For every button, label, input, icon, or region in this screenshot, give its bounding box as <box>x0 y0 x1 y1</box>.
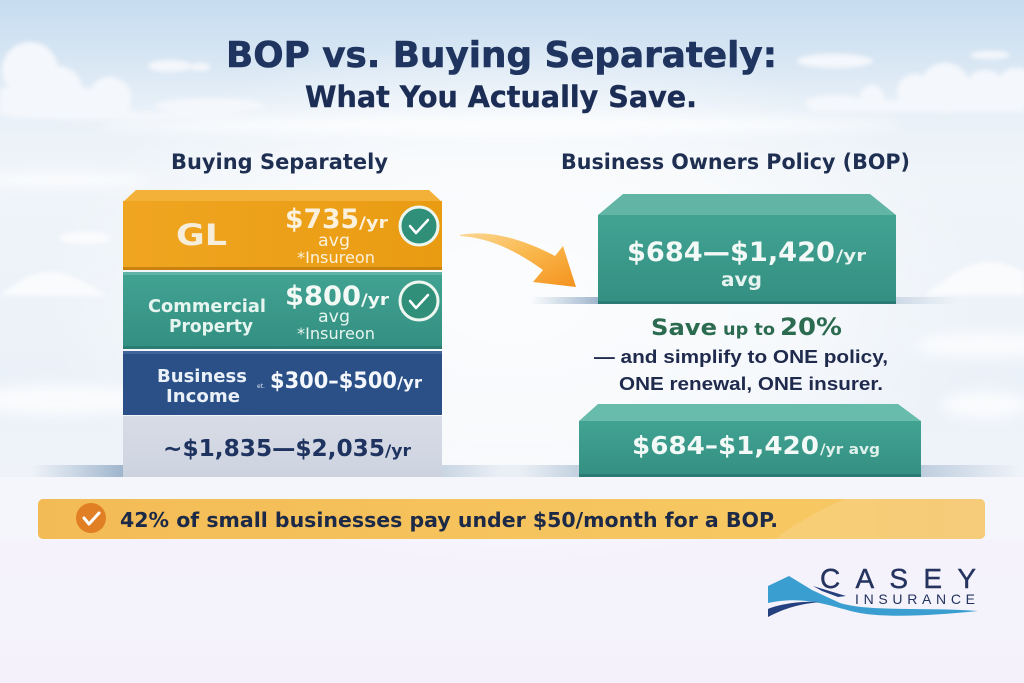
callout: savings: 20% <box>780 313 842 341</box>
callout: savings <box>594 313 888 394</box>
block: commercial property: Commercial <box>148 296 266 317</box>
block: general liability: avg <box>318 231 350 251</box>
callout: savings: Save <box>651 316 717 341</box>
block: business income: $300–$500 <box>270 369 397 394</box>
panel: BOP bottom block: /yr avg <box>820 442 880 458</box>
block: commercial property <box>123 272 442 349</box>
callout: savings: ONE renewal, ONE insurer. <box>619 374 883 394</box>
title: What You Actually Save. <box>305 80 697 114</box>
block: general liability <box>123 190 442 270</box>
logo: Casey Insurance: INSURANCE <box>855 591 975 607</box>
panel: buying separately stack <box>123 190 442 477</box>
panel: BOP bottom block: $684–$1,420 <box>632 431 819 460</box>
panel: BOP top block: $684—$1,420 <box>627 237 835 268</box>
title <box>226 35 777 114</box>
block: commercial property: Property <box>169 316 253 337</box>
block: commercial property: /yr <box>361 290 389 309</box>
block: general liability: *Insureon <box>297 248 375 267</box>
block: business income: /yr <box>397 373 422 392</box>
cloud: side wisps <box>0 232 1024 296</box>
icon: check badge <box>76 503 106 533</box>
block: total: /yr <box>385 441 411 460</box>
block: commercial property: avg <box>318 307 350 327</box>
callout: savings: up to <box>723 320 775 340</box>
block: business income <box>123 351 442 415</box>
block: general liability: /yr <box>359 213 388 232</box>
panel: BOP bottom block <box>579 404 921 477</box>
block: business income: Business <box>157 366 247 387</box>
block: business income: et. <box>257 383 265 390</box>
block: general liability: $735 <box>285 204 359 235</box>
banner: 42% stat: 42% of small businesses pay under $50/month for a BOP. <box>120 508 778 532</box>
callout: savings: — and simplify to ONE policy, <box>594 347 888 367</box>
icon: check <box>400 207 438 245</box>
panel: BOP top block: avg <box>721 269 762 291</box>
block: commercial property: $800 <box>285 281 361 312</box>
logo: Casey Insurance: CASEY <box>820 563 976 594</box>
panel: BOP top block <box>598 194 896 304</box>
banner: 42% stat <box>38 499 985 539</box>
arrow <box>460 233 576 287</box>
panel: BOP top block: /yr <box>836 246 866 265</box>
block: general liability: GL <box>176 218 227 252</box>
block: business income: Income <box>166 386 240 407</box>
icon: check <box>400 282 438 320</box>
block: commercial property: *Insureon <box>297 324 375 343</box>
cloud: top right <box>797 51 1024 113</box>
heading: business owners policy: Business Owners Policy (BOP) <box>561 150 910 174</box>
block: total: ~$1,835—$2,035 <box>163 436 385 462</box>
title: BOP vs. Buying Separately: <box>226 35 777 76</box>
block: total <box>123 416 442 477</box>
cloud: top left <box>0 42 265 120</box>
heading: buying separately: Buying Separately <box>171 150 388 174</box>
logo: Casey Insurance <box>768 563 978 617</box>
